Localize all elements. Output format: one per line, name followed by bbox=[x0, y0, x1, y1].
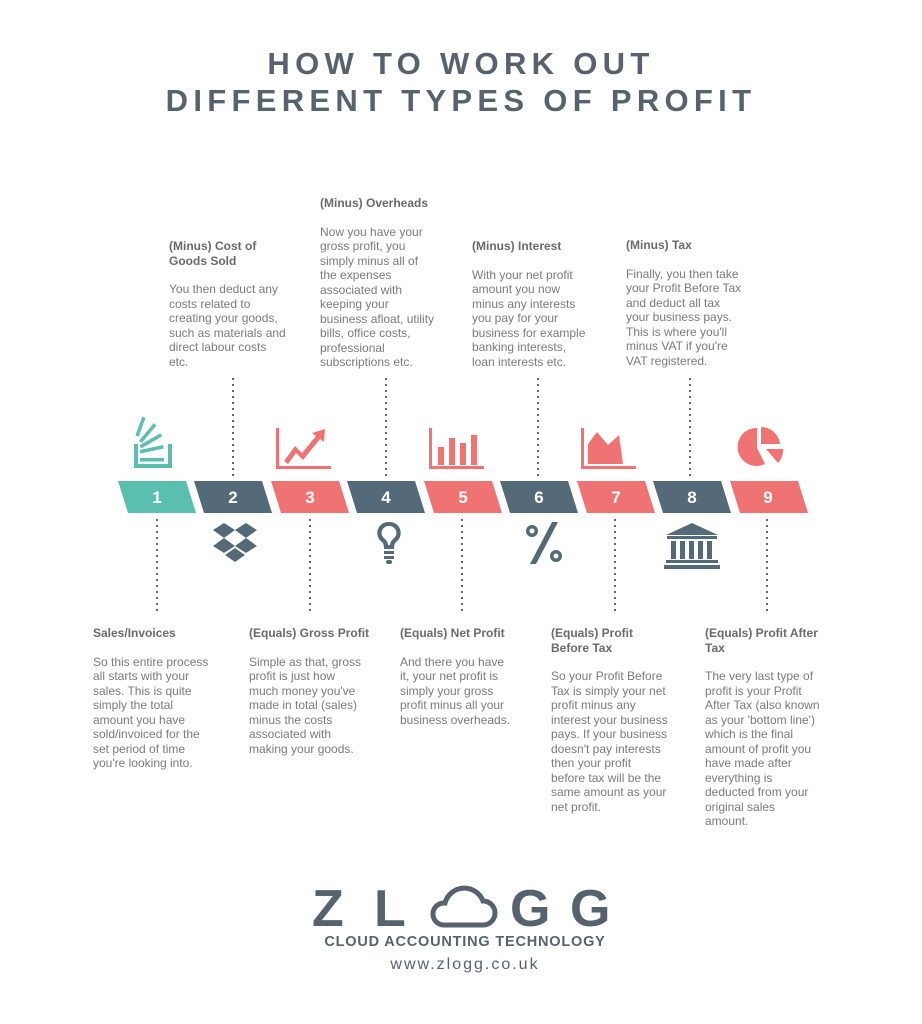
icon: bar chart bbox=[429, 428, 484, 469]
text: step 7 profit before tax: interest your business bbox=[551, 712, 668, 726]
timeline graphic bbox=[118, 378, 808, 611]
icon: bank bbox=[664, 523, 720, 569]
text: step 9 profit after tax: The very last type of bbox=[705, 669, 813, 683]
text: step 2 cost of goods sold: (Minus) Cost of bbox=[169, 239, 256, 253]
text: step 3 gross profit: made in total (sales) bbox=[249, 698, 357, 712]
text: step 1 sales: sold/invoiced for the bbox=[93, 727, 200, 741]
text: step 5 net profit: (Equals) Net Profit bbox=[400, 626, 505, 640]
text: step 5 net profit bbox=[400, 626, 510, 726]
text: step 6 interest: With your net profit bbox=[472, 268, 573, 282]
logo letters: Z bbox=[312, 880, 344, 938]
logo letters bbox=[312, 880, 610, 938]
icon: stack tray bbox=[134, 417, 172, 468]
text: step 2 cost of goods sold: such as materials and bbox=[169, 326, 286, 340]
text: step 2 cost of goods sold: You then deduct any bbox=[169, 282, 278, 296]
text: step 7 profit before tax: (Equals) Profit bbox=[551, 626, 633, 640]
timeline band with numbered steps: 1 bbox=[152, 488, 162, 507]
text: step 5 net profit: it, your net profit is bbox=[400, 669, 498, 683]
text: step 6 interest: banking interests, bbox=[472, 340, 566, 354]
text: step 1 sales: set period of time bbox=[93, 742, 185, 756]
timeline band with numbered steps: 8 bbox=[687, 488, 697, 507]
icon: pie chart bbox=[738, 427, 783, 466]
title: DIFFERENT TYPES OF PROFIT bbox=[166, 83, 756, 118]
title bbox=[166, 46, 756, 118]
text: step 4 overheads: keeping your bbox=[320, 297, 389, 311]
text: step 7 profit before tax: pays. If your business bbox=[551, 727, 667, 741]
text: step 6 interest: you pay for your bbox=[472, 311, 558, 325]
text: step 5 net profit: profit minus all your bbox=[400, 698, 504, 712]
text: step 4 overheads: simply minus all of bbox=[320, 254, 418, 268]
text: step 4 overheads: associated with bbox=[320, 282, 402, 296]
text: step 8 tax: minus VAT if you're bbox=[626, 339, 728, 353]
text: step 2 cost of goods sold: creating your goods, bbox=[169, 311, 278, 325]
text: step 7 profit before tax: Before Tax bbox=[551, 640, 612, 654]
text: step 9 profit after tax: (Equals) Profit After bbox=[705, 626, 818, 640]
text: step 1 sales: amount you have bbox=[93, 712, 185, 726]
text: step 1 sales: sales. This is quite bbox=[93, 684, 192, 698]
text: step 1 sales: you're looking into. bbox=[93, 756, 193, 770]
text: step 2 cost of goods sold: direct labour costs bbox=[169, 340, 266, 354]
url: www.zlogg.co.uk bbox=[389, 956, 540, 973]
text: step 4 overheads: the expenses bbox=[320, 268, 391, 282]
text: step 4 overheads bbox=[320, 196, 434, 369]
logo: ZLOGG bbox=[312, 880, 610, 973]
timeline band with numbered steps: 3 bbox=[305, 488, 315, 507]
text: step 1 sales: So this entire process bbox=[93, 654, 208, 668]
text: step 5 net profit: business overheads. bbox=[400, 712, 510, 726]
text: step 4 overheads: business afloat, utility bbox=[320, 312, 434, 326]
text: step 2 cost of goods sold: etc. bbox=[169, 354, 188, 368]
text: step 3 gross profit bbox=[249, 626, 369, 756]
icon: line chart up bbox=[276, 428, 331, 469]
text: step 3 gross profit: associated with bbox=[249, 727, 331, 741]
text: step 3 gross profit: much money you've bbox=[249, 684, 355, 698]
timeline band with numbered steps: 5 bbox=[458, 488, 468, 507]
text: step 6 interest: amount you now bbox=[472, 282, 560, 296]
text: step 1 sales: simply the total bbox=[93, 698, 173, 712]
timeline band with numbered steps: 6 bbox=[534, 488, 544, 507]
text: step 3 gross profit: Simple as that, gross bbox=[249, 654, 361, 668]
text: step 9 profit after tax: Tax bbox=[705, 640, 725, 654]
text: step 7 profit before tax: profit minus any bbox=[551, 698, 636, 712]
text: step 8 tax: This is where you'll bbox=[626, 324, 727, 338]
text: step 9 profit after tax: have made after bbox=[705, 756, 792, 770]
title: HOW TO WORK OUT bbox=[267, 46, 655, 81]
text: step 2 cost of goods sold: costs related to bbox=[169, 296, 250, 310]
text: step 1 sales: all starts with your bbox=[93, 669, 189, 683]
text: step 7 profit before tax: doesn't pay interests bbox=[551, 742, 661, 756]
logo letters: L bbox=[374, 880, 406, 938]
text: step 5 net profit: And there you have bbox=[400, 654, 504, 668]
timeline band with numbered steps: 7 bbox=[611, 488, 621, 507]
text: step 7 profit before tax: Tax is simply your net bbox=[551, 684, 666, 698]
icon: area chart bbox=[581, 428, 636, 469]
text: step 4 overheads: subscriptions etc. bbox=[320, 355, 413, 369]
text: step 3 gross profit: minus the costs bbox=[249, 712, 332, 726]
text: step 7 profit before tax bbox=[551, 626, 668, 814]
text: step 8 tax: (Minus) Tax bbox=[626, 238, 692, 252]
text: step 7 profit before tax: then your profit bbox=[551, 756, 631, 770]
text: step 8 tax: your Profit Before Tax bbox=[626, 281, 741, 295]
text: step 9 profit after tax: original sales bbox=[705, 800, 775, 814]
text: step 6 interest: minus any interests bbox=[472, 296, 575, 310]
text: step 3 gross profit: making your goods. bbox=[249, 742, 354, 756]
text: step 4 overheads: gross profit, you bbox=[320, 239, 405, 253]
text: step 4 overheads: Now you have your bbox=[320, 224, 423, 238]
text: step 6 interest: (Minus) Interest bbox=[472, 239, 561, 253]
text: step 9 profit after tax: everything is bbox=[705, 770, 772, 784]
logo letters: G bbox=[570, 880, 610, 938]
text: step 2 cost of goods sold bbox=[169, 239, 286, 368]
text: step 9 profit after tax: which is the final bbox=[705, 727, 793, 741]
text: step 1 sales bbox=[93, 626, 208, 770]
icon: dropbox bbox=[213, 523, 257, 562]
icon: light bulb bbox=[377, 522, 401, 564]
icon: percent bbox=[526, 522, 562, 564]
text: step 9 profit after tax: as your 'bottom line') bbox=[705, 712, 815, 726]
text: step 7 profit before tax: net profit. bbox=[551, 800, 601, 814]
text: step 7 profit before tax: So your Profit Before bbox=[551, 669, 662, 683]
icon: cloud bbox=[433, 888, 495, 925]
timeline band with numbered steps: 4 bbox=[381, 488, 391, 507]
text: step 8 tax: VAT registered. bbox=[626, 354, 707, 368]
text: step 5 net profit: simply your gross bbox=[400, 684, 493, 698]
text: step 4 overheads: professional bbox=[320, 340, 385, 354]
text: step 8 tax bbox=[626, 238, 741, 368]
text: step 9 profit after tax: amount of profit you bbox=[705, 742, 811, 756]
timeline band with numbered steps bbox=[118, 481, 808, 513]
logo letters: G bbox=[510, 880, 550, 938]
text: step 6 interest: loan interests etc. bbox=[472, 354, 566, 368]
text: step 8 tax: your business pays. bbox=[626, 310, 732, 324]
text: step 8 tax: and deduct all tax bbox=[626, 296, 720, 310]
text: step 8 tax: Finally, you then take bbox=[626, 266, 739, 280]
text: step 3 gross profit: (Equals) Gross Profit bbox=[249, 626, 369, 640]
text: step 3 gross profit: profit is just how bbox=[249, 669, 335, 683]
timeline band with numbered steps: 2 bbox=[228, 488, 238, 507]
text: step 1 sales: Sales/Invoices bbox=[93, 626, 176, 640]
text: step 9 profit after tax: deducted from your bbox=[705, 785, 808, 799]
text: step 4 overheads: bills, office costs, bbox=[320, 326, 410, 340]
text: step 2 cost of goods sold: Goods Sold bbox=[169, 254, 236, 268]
text: step 6 interest: business for example bbox=[472, 326, 585, 340]
text: step 9 profit after tax bbox=[705, 626, 820, 828]
text: step 4 overheads: (Minus) Overheads bbox=[320, 196, 428, 210]
timeline band with numbered steps: 9 bbox=[763, 488, 773, 507]
text: step 9 profit after tax: amount. bbox=[705, 814, 748, 828]
text: step 7 profit before tax: same amount as your bbox=[551, 785, 666, 799]
text: step 7 profit before tax: before tax will be the bbox=[551, 770, 661, 784]
text: step 9 profit after tax: After Tax (also known bbox=[705, 698, 820, 712]
text: step 6 interest bbox=[472, 239, 585, 368]
text: step 9 profit after tax: profit is your Profit bbox=[705, 684, 802, 698]
tagline: CLOUD ACCOUNTING TECHNOLOGY bbox=[324, 934, 606, 950]
